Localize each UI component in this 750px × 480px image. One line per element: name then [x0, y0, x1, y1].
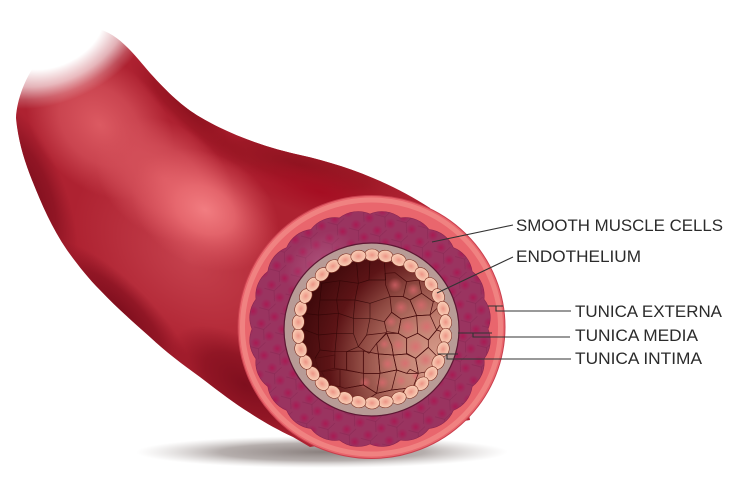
- label: tunica externa: [488, 302, 723, 321]
- label: tunica media: TUNICA MEDIA: [575, 326, 699, 345]
- lit cell outlines: [318, 272, 441, 397]
- label: smooth muscle cells: [432, 216, 723, 242]
- label: endothelium: ENDOTHELIUM: [516, 247, 641, 266]
- label: tunica intima: TUNICA INTIMA: [575, 349, 703, 368]
- label: endothelium: [437, 247, 641, 293]
- tunica externa ring: [238, 196, 505, 458]
- body shading: upper dark edge: [140, 62, 232, 145]
- vessel body: [16, 31, 470, 447]
- ground shadow: [136, 436, 508, 468]
- label: tunica media: [458, 326, 699, 345]
- fading top of vessel: [0, 0, 180, 140]
- nuclei of lit cells: [359, 278, 435, 389]
- body highlight: lower spot: [150, 159, 271, 262]
- endothelial cell wall mosaic: [303, 260, 447, 403]
- body highlight: band middle: [112, 128, 216, 222]
- endothelium bead ring: [292, 249, 452, 409]
- cross-section: [238, 196, 505, 458]
- dark cell outlines: [303, 260, 390, 358]
- tunica intima ring: [284, 243, 459, 416]
- tunica media ring: [250, 212, 490, 446]
- body shading: lower-left dark edge: [16, 118, 71, 254]
- label: smooth muscle cells: SMOOTH MUSCLE CELLS: [516, 216, 723, 235]
- body shading: lower dark edge: [66, 250, 184, 365]
- lumen: [300, 259, 447, 403]
- body shading: bottom dark area: [180, 332, 294, 438]
- body shading: upper dark edge right: [226, 130, 402, 192]
- body highlight: broad band: [34, 67, 162, 188]
- body shading: red near mouth: [273, 181, 354, 206]
- label: tunica externa: TUNICA EXTERNA: [575, 302, 723, 321]
- label: tunica intima: [438, 349, 703, 368]
- body shading: mid red field: [104, 203, 261, 334]
